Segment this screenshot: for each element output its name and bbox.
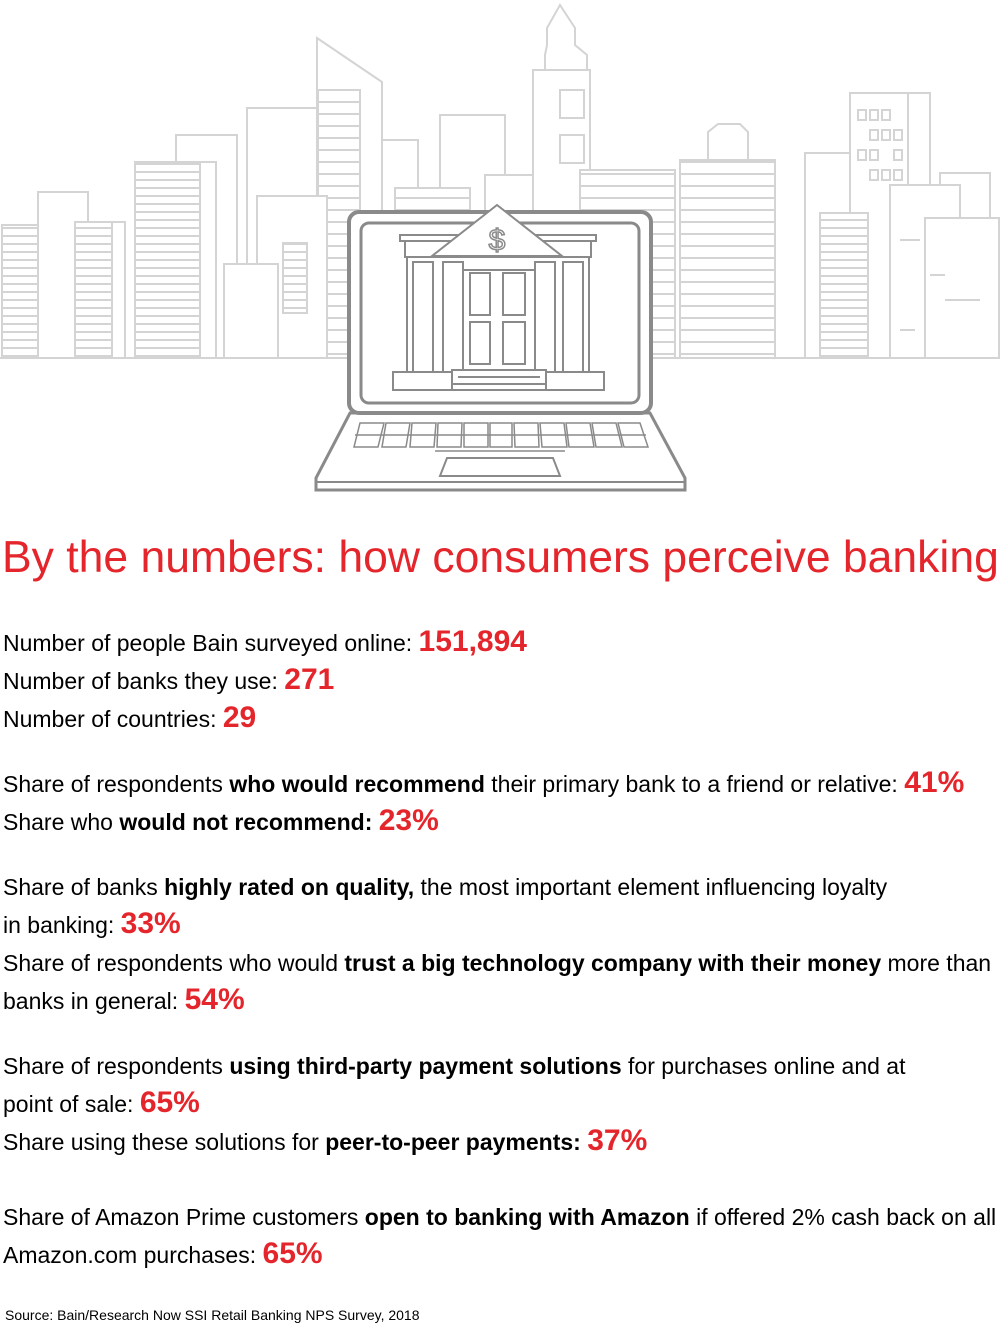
skyline bbox=[0, 5, 1000, 358]
stats block: survey bbox=[3, 625, 527, 734]
stats block: survey: Number of countries: 29 bbox=[3, 701, 256, 734]
stats block: quality and trust: in banking: 33% bbox=[3, 907, 181, 940]
icon: bank building bbox=[393, 205, 604, 390]
stats block: recommend: Share who would not recommend: 23% bbox=[3, 804, 439, 837]
stats block: survey: Number of banks they use: 271 bbox=[3, 663, 334, 696]
stats block: payments bbox=[3, 1053, 906, 1157]
stats block: quality and trust: Share of respondents who would trust a big technology company with their money more than bbox=[3, 950, 991, 976]
source note: Source: Bain/Research Now SSI Retail Banking NPS Survey, 2018 bbox=[5, 1307, 420, 1323]
stats block: amazon bbox=[3, 1204, 996, 1270]
stats block: recommend bbox=[3, 766, 964, 837]
stats block: payments: Share using these solutions for peer-to-peer payments: 37% bbox=[3, 1124, 647, 1157]
laptop bbox=[316, 212, 685, 490]
stats block: amazon: Amazon.com purchases: 65% bbox=[3, 1237, 323, 1270]
stats block: payments: Share of respondents using third-party payment solutions for purchases online and at bbox=[3, 1053, 906, 1079]
stats block: survey: Number of people Bain surveyed online: 151,894 bbox=[3, 625, 527, 658]
stats block: quality and trust bbox=[3, 874, 991, 1016]
stats block: quality and trust: Share of banks highly rated on quality, the most important element influencing loyalty bbox=[3, 874, 887, 900]
stats block: amazon: Share of Amazon Prime customers open to banking with Amazon if offered 2% cash back on all bbox=[3, 1204, 996, 1230]
stats block: recommend: Share of respondents who would recommend their primary bank to a friend or relative: 41% bbox=[3, 766, 964, 799]
stats block: quality and trust: banks in general: 54% bbox=[3, 983, 245, 1016]
title: By the numbers: how consumers perceive banking bbox=[2, 533, 999, 582]
illustration: city skyline with laptop bank: $ bbox=[489, 224, 506, 257]
illustration: city skyline with laptop bank bbox=[0, 3, 1000, 492]
stats block: payments: point of sale: 65% bbox=[3, 1086, 200, 1119]
